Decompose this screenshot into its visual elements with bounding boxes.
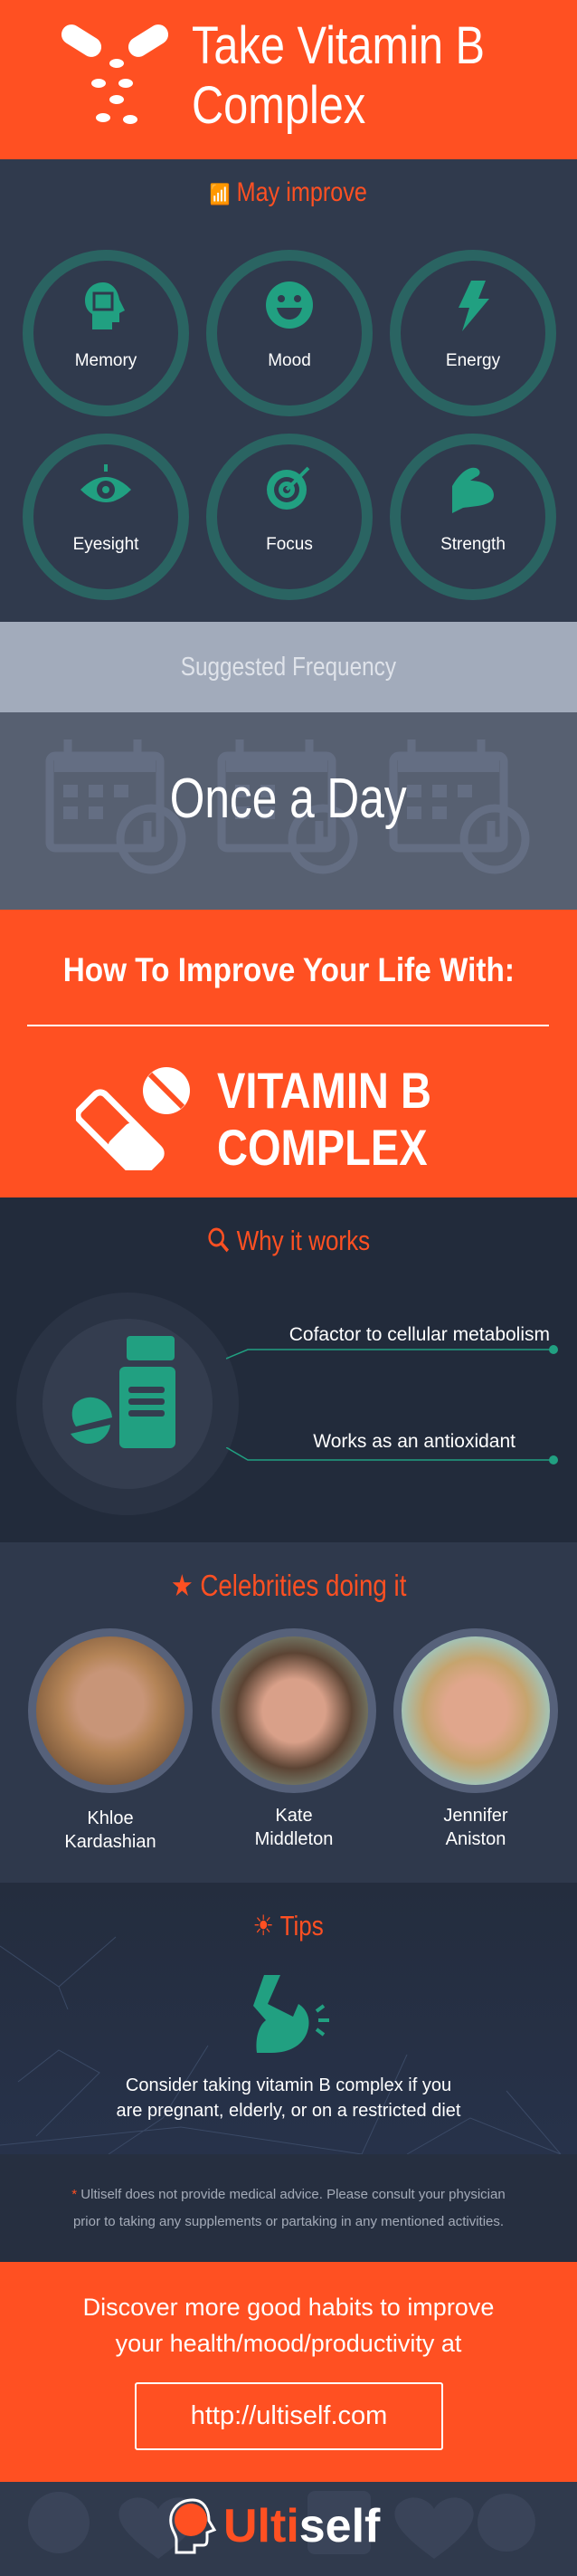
item: mood: Mood (268, 351, 311, 370)
text: tip (117, 2075, 461, 2121)
text: vitamin b complex: COMPLEX (217, 1119, 428, 1176)
item: energy: Energy (446, 351, 500, 370)
button: url (135, 2382, 443, 2450)
disclaimer: * Ultiself does not provide medical advice. Please consult your physician (71, 2187, 506, 2202)
names: Kardashian (64, 1832, 156, 1852)
panel: why it works (0, 1197, 577, 1542)
disclaimer (0, 2154, 577, 2262)
logo: Ultiself (223, 2500, 380, 2552)
panel: may improve (0, 159, 577, 622)
item: energy (390, 250, 556, 416)
item: memory: Memory (75, 351, 137, 370)
text: your health/mood/productivity at (116, 2330, 461, 2357)
callout: antioxidant (226, 1431, 558, 1465)
footer (0, 2482, 577, 2576)
icon: pill and tablet (76, 1067, 190, 1170)
panel: discover (0, 2262, 577, 2482)
heading: may improve: 📶 May improve (210, 177, 367, 207)
title: Take Vitamin B (192, 16, 485, 75)
text (83, 2294, 494, 2357)
title (192, 16, 485, 135)
item: memory (23, 250, 189, 416)
title: Complex (192, 76, 365, 135)
icon: pills (61, 24, 168, 124)
panel: celebrities: Middleton (255, 1829, 333, 1849)
band: suggested frequency: Suggested Frequency (181, 653, 396, 682)
item: strength (390, 434, 556, 600)
item: focus (206, 434, 373, 600)
text: tip: Consider taking vitamin B complex if you (126, 2075, 451, 2095)
item: eyesight: Eyesight (73, 535, 138, 554)
text: vitamin b complex (217, 1062, 431, 1176)
callout: cofactor: Cofactor to cellular metabolism (289, 1324, 550, 1345)
item: mood (206, 250, 373, 416)
panel: celebrities: Aniston (446, 1829, 506, 1849)
panel: celebrities: Jennifer (443, 1806, 508, 1826)
heading: Why it works (236, 1225, 370, 1256)
item: focus: Focus (266, 535, 313, 554)
text: Discover more good habits to improve (83, 2294, 494, 2321)
icon: bottle in circles (16, 1293, 239, 1515)
item: eyesight (23, 434, 189, 600)
panel: how to improve (0, 910, 577, 1197)
header (0, 0, 577, 159)
icon: calendars background (45, 739, 530, 874)
band: suggested frequency (0, 622, 577, 712)
text: once a day: Once a Day (170, 768, 407, 830)
heading: ★ Celebrities doing it (171, 1569, 406, 1602)
button: url: http://ultiself.com (191, 2401, 387, 2430)
disclaimer: prior to taking any supplements or partaking in any mentioned activities. (73, 2214, 504, 2229)
heading: How To Improve Your Life With: (62, 951, 515, 988)
photo: kate (212, 1628, 376, 1793)
panel: tips (0, 1883, 577, 2154)
text: vitamin b complex: VITAMIN B (217, 1062, 431, 1119)
panel: celebrities (0, 1542, 577, 1883)
photo: jennifer (393, 1628, 558, 1793)
names: Khloe (87, 1808, 134, 1828)
photo: khloe (28, 1628, 193, 1793)
names (64, 1808, 156, 1852)
item: strength: Strength (440, 535, 506, 554)
text: tip: are pregnant, elderly, or on a restricted diet (117, 2101, 460, 2121)
panel: celebrities: Kate (275, 1806, 313, 1826)
heading: ☀ Tips (253, 1910, 324, 1942)
callout: cofactor (226, 1324, 558, 1360)
callout: antioxidant: Works as an antioxidant (313, 1431, 516, 1452)
panel: once a day (0, 712, 577, 910)
icon: pregnant (253, 1975, 329, 2053)
